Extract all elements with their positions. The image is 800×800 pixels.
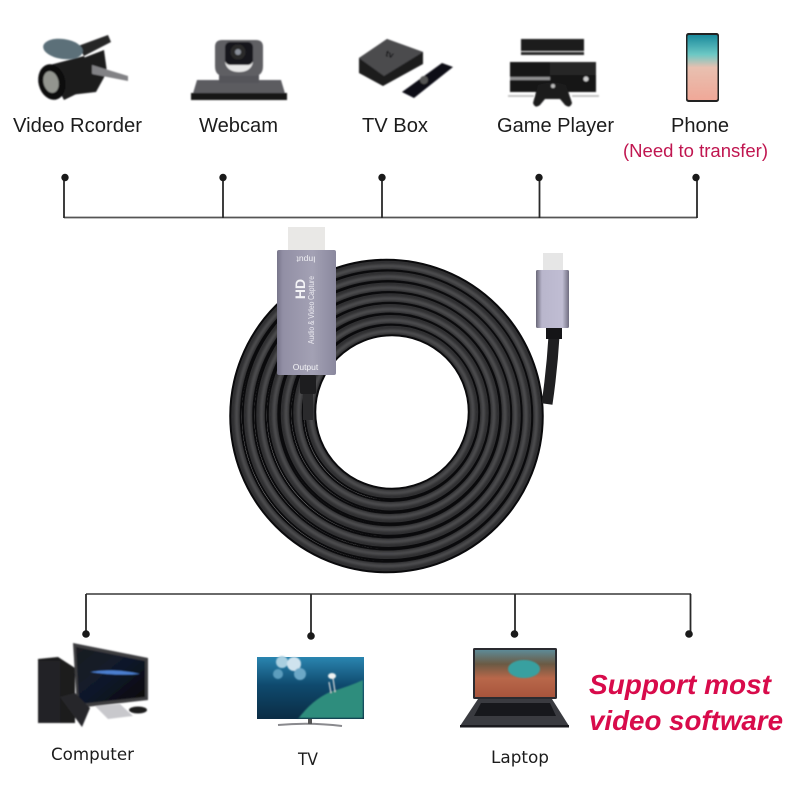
callout: software support: Support most [589,669,773,700]
icon: laptop [460,648,569,728]
capture body [277,250,336,375]
icon: phone [686,33,719,102]
strain relief [300,375,316,420]
label: Game Player: Game Player [497,115,614,137]
icon: video recorder [35,35,128,103]
cable coil [236,265,538,567]
label: need to transfer note: (Need to transfer) [623,140,768,161]
icon: TV [257,656,364,726]
label: Phone: Phone [671,115,729,137]
label: Output: Output [293,362,319,372]
icon: game player [508,39,599,107]
label: HD: HD [292,279,308,299]
icon: webcam [191,40,287,100]
HDMI plug [288,227,325,251]
label: TV Box: TV Box [362,115,428,137]
HDMI capture connector [277,227,336,420]
callout: software support: video software [589,705,783,736]
label: Webcam: Webcam [199,115,278,137]
label: Video Rcorder: Video Rcorder [13,115,142,137]
label: TV: TV [297,750,319,769]
label: Audio and Video Capture: Audio & Video Capture [307,276,316,344]
cable tail to USB-C [547,336,554,404]
connector tree: output devices [82,594,693,640]
label: Computer: Computer [51,745,134,764]
label: Laptop: Laptop [491,748,549,767]
icon: TV box [359,39,453,98]
label: Input: Input [296,254,315,264]
connector tree: input devices [61,174,700,218]
callout: software support [589,669,783,736]
icon: TV box: tv [384,48,395,60]
icon: computer [38,643,148,727]
USB-C connector [536,253,569,339]
